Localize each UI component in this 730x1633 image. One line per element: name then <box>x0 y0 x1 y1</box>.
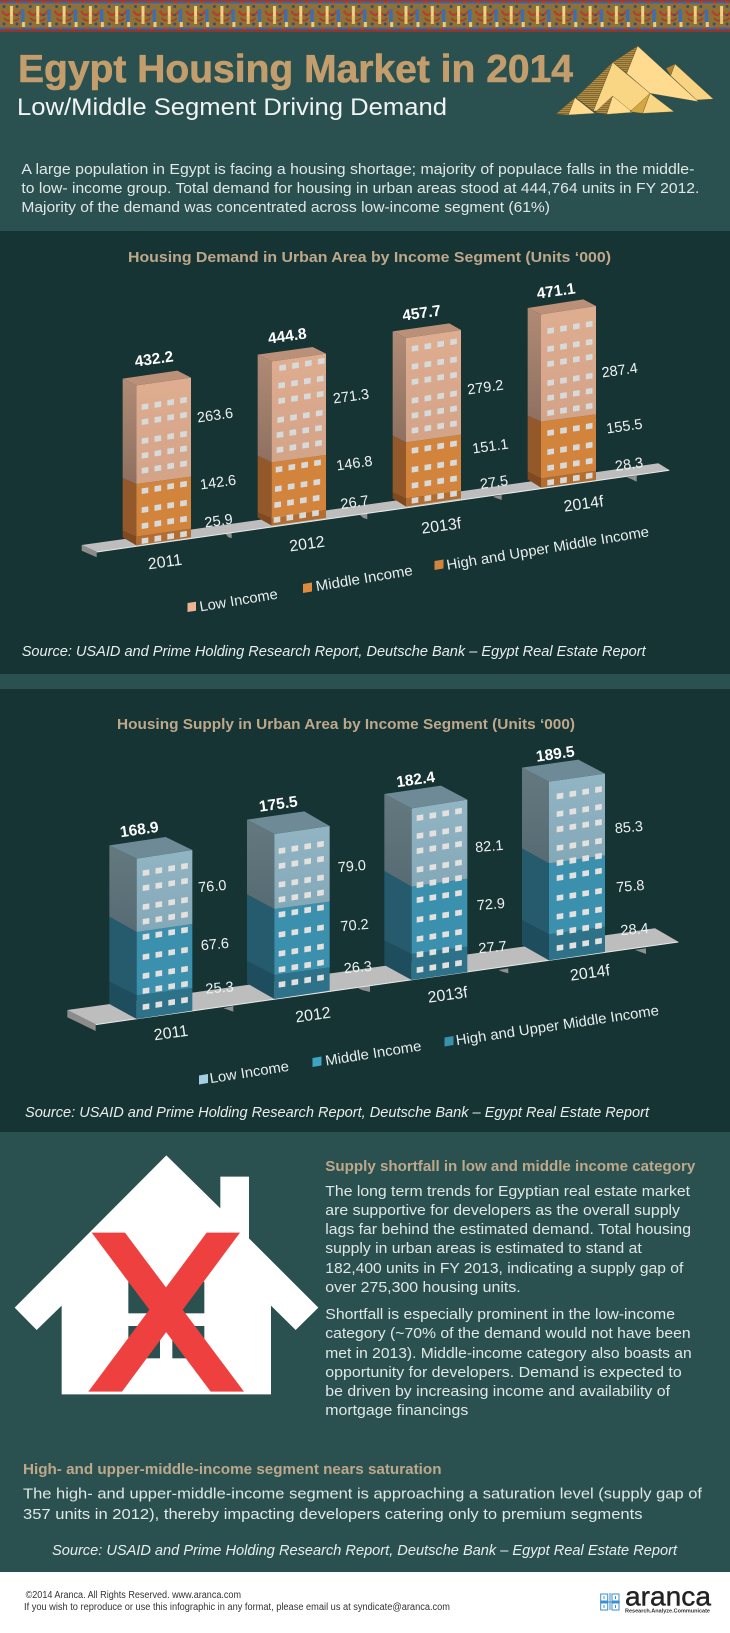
demand data labels: 457.7 <box>401 302 442 325</box>
demand year labels: 2013f <box>420 515 463 538</box>
supply year labels: 2012 <box>294 1005 332 1026</box>
text block: supply shortfall paragraph one: supply in urban areas is estimated to stand at <box>325 1240 643 1257</box>
panel: housing demand chart <box>0 231 730 674</box>
supply data labels <box>119 743 649 998</box>
copyright notice: If you wish to reproduce or use this infographic in any format, please email us at syndicate@aranca.com <box>24 1602 450 1613</box>
demand data labels: 28.3 <box>614 455 644 475</box>
demand year labels: 2011 <box>147 552 183 573</box>
supply data labels: 76.0 <box>198 878 227 896</box>
intro paragraph: Majority of the demand was concentrated across low-income segment (61%) <box>21 199 550 216</box>
text block: supply shortfall paragraph two <box>325 1306 692 1419</box>
subtitle: Low/Middle Segment Driving Demand <box>17 94 447 121</box>
supply building 2011 <box>109 837 192 1019</box>
supply data labels: 79.0 <box>337 858 367 876</box>
demand data labels: 432.2 <box>134 348 174 371</box>
text block: supply shortfall paragraph one: over 275,300 housing units. <box>325 1279 521 1296</box>
demand year labels <box>147 493 605 573</box>
demand data labels: 25.9 <box>204 512 234 531</box>
copyright notice: ©2014 Aranca. All Rights Reserved. www.aranca.com <box>26 1590 241 1601</box>
demand data labels: 444.8 <box>267 325 308 348</box>
demand legend: High and Upper Middle Income <box>445 524 650 574</box>
supply data labels: 85.3 <box>614 819 644 837</box>
demand building 2011 <box>123 371 191 545</box>
demand building 2013f <box>393 323 461 507</box>
demand data labels: 142.6 <box>199 473 237 493</box>
supply year labels: 2013f <box>427 984 469 1007</box>
logo: aranca <box>600 1582 712 1615</box>
supply year labels: 2014f <box>569 962 612 985</box>
supply building 2012 <box>247 811 330 999</box>
text block: saturation: The high- and upper-middle-income segment is approaching a saturation level (supply gap of <box>23 1486 703 1502</box>
demand data labels: 471.1 <box>536 280 577 303</box>
demand building 2012 <box>258 347 326 526</box>
supply year labels <box>153 962 612 1044</box>
heading: saturation: High- and upper-middle-income segment nears saturation <box>23 1461 442 1478</box>
text block: supply shortfall paragraph one: lags far behind the estimated demand. Total housing <box>325 1221 691 1238</box>
demand legend <box>188 524 650 615</box>
demand data labels: 26.7 <box>340 493 370 513</box>
intro paragraph <box>21 161 699 216</box>
supply building 2014f <box>522 760 605 960</box>
supply legend: Middle Income <box>324 1039 423 1070</box>
supply data labels: 72.9 <box>476 896 506 914</box>
text block: supply shortfall paragraph two: Shortfall is especially prominent in the low-income <box>325 1306 675 1323</box>
demand data labels: 146.8 <box>335 454 374 474</box>
supply data labels: 182.4 <box>395 769 436 791</box>
copyright notice <box>24 1590 450 1613</box>
text block: supply shortfall paragraph one: The long term trends for Egyptian real estate market <box>325 1183 691 1200</box>
text block: supply shortfall paragraph two: met in 2013). Middle-income category also boasts an <box>325 1345 692 1362</box>
demand data labels: 155.5 <box>605 417 644 437</box>
demand year labels: 2014f <box>563 493 605 516</box>
demand data labels: 287.4 <box>601 361 639 381</box>
demand data labels: 263.6 <box>196 406 234 426</box>
demand year labels: 2012 <box>288 534 326 555</box>
demand data labels: 27.5 <box>479 473 509 493</box>
logo: aranca: Research.Analyze.Communicate <box>625 1609 710 1615</box>
decorative Egyptian border band <box>0 0 730 32</box>
text block: supply shortfall paragraph one: 182,400 units in FY 2013, indicating a supply gap of <box>325 1260 684 1277</box>
supply data labels: 175.5 <box>258 793 299 816</box>
text block: supply shortfall paragraph two: category (~70% of the demand would not have been <box>325 1325 691 1342</box>
supply data labels: 25.3 <box>205 979 234 998</box>
text block: supply shortfall paragraph one <box>325 1183 691 1296</box>
supply platform <box>67 928 678 1031</box>
icon: pyramids <box>556 46 713 115</box>
supply data labels: 28.4 <box>620 921 649 939</box>
icon: house with red cross <box>15 1155 318 1394</box>
title: Egypt Housing Market in 2014 <box>18 48 573 91</box>
text block: saturation: 357 units in 2012), thereby impacting developers catering only to premium segments <box>23 1506 642 1523</box>
intro paragraph: to low- income group. Total demand for housing in urban areas stood at 444,764 units in FY 2012. <box>21 180 699 197</box>
intro paragraph: A large population in Egypt is facing a housing shortage; majority of populace falls in the middle- <box>21 161 694 178</box>
text block: supply shortfall paragraph two: opportunity for developers. Demand is expected to <box>325 1364 682 1381</box>
demand data labels: 271.3 <box>332 387 370 407</box>
supply source: Source: USAID and Prime Holding Research Report, Deutsche Bank – Egypt Real Estate Report <box>25 1104 650 1121</box>
demand legend: Low Income <box>198 587 279 615</box>
supply data labels: 70.2 <box>340 917 369 935</box>
supply legend: High and Upper Middle Income <box>455 1003 660 1049</box>
demand building 2014f <box>528 299 596 488</box>
text block: supply shortfall paragraph two: mortgage financings <box>325 1402 468 1419</box>
supply building 2013f <box>384 786 467 980</box>
supply data labels: 75.8 <box>616 878 645 896</box>
demand platform <box>82 463 669 557</box>
supply data labels: 27.7 <box>478 939 507 957</box>
footer <box>0 1572 730 1633</box>
supply legend: Low Income <box>209 1059 290 1087</box>
supply year labels: 2011 <box>153 1023 189 1044</box>
supply data labels: 168.9 <box>119 819 160 841</box>
logo: aranca: aranca <box>625 1582 712 1612</box>
heading: supply shortfall: Supply shortfall in low and middle income category <box>325 1158 696 1175</box>
demand data labels <box>134 280 644 531</box>
demand data labels: 151.1 <box>471 437 510 457</box>
supply chart heading: Housing Supply in Urban Area by Income Segment (Units ‘000) <box>117 716 575 733</box>
demand source: Source: USAID and Prime Holding Research Report, Deutsche Bank – Egypt Real Estate Report <box>22 643 646 660</box>
text block: saturation <box>23 1486 703 1523</box>
text block: supply shortfall paragraph two: be driven by increasing income and availability of <box>325 1383 671 1400</box>
supply data labels: 67.6 <box>200 936 230 954</box>
demand data labels: 279.2 <box>466 378 505 398</box>
panel: housing supply chart <box>0 689 730 1132</box>
supply data labels: 82.1 <box>475 838 504 856</box>
bottom source: Source: USAID and Prime Holding Research Report, Deutsche Bank – Egypt Real Estate Report <box>52 1542 678 1559</box>
demand chart heading: Housing Demand in Urban Area by Income Segment (Units ‘000) <box>128 249 611 266</box>
supply data labels: 26.3 <box>343 959 373 977</box>
text block: supply shortfall paragraph one: are supportive for developers as the overall supply <box>325 1202 681 1219</box>
demand legend: Middle Income <box>315 563 414 595</box>
supply legend <box>199 1003 660 1087</box>
supply data labels: 189.5 <box>535 743 576 766</box>
